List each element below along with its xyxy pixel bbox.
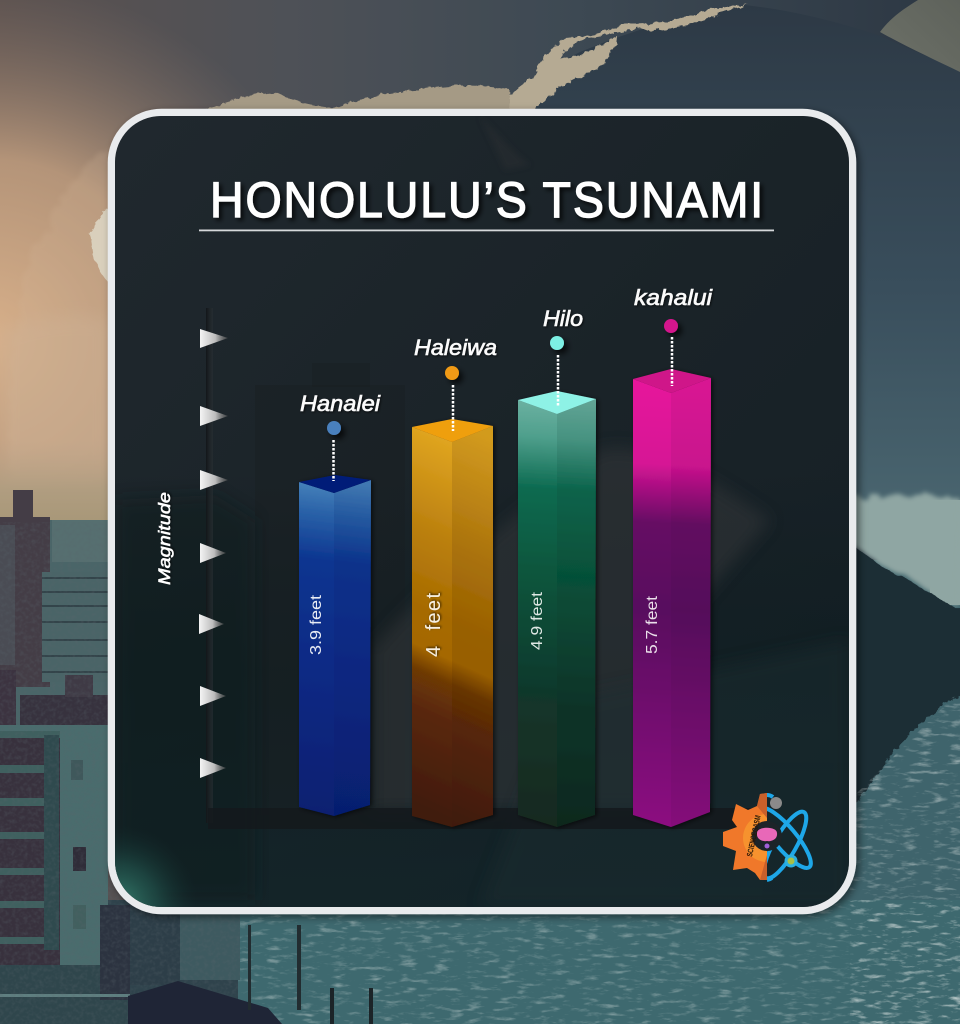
callout: Haleiwa: Haleiwa xyxy=(414,335,497,360)
low cloud strip above panel xyxy=(200,86,510,112)
title underline xyxy=(199,230,774,231)
callout: Hilo: Hilo xyxy=(543,306,583,331)
left cloud xyxy=(10,145,112,500)
brain core xyxy=(752,821,782,851)
bar: Hilo xyxy=(518,391,596,827)
dark wave face xyxy=(845,540,960,810)
logo: gear and atom xyxy=(723,793,818,883)
value label: 4.9 feet xyxy=(529,591,546,650)
dark storm cloud mass xyxy=(480,5,960,520)
wave and sea xyxy=(840,560,960,1024)
bright cloud ridge xyxy=(502,4,748,110)
value label: 4 feet xyxy=(423,593,445,657)
callout: Hanalei xyxy=(300,391,381,481)
bar: Haleiwa xyxy=(412,419,493,827)
logo wordmark: SCIENCEGASM xyxy=(745,814,763,857)
callout: kahalui xyxy=(634,285,713,386)
earth xyxy=(784,854,798,868)
foam crest xyxy=(845,495,960,608)
top-right cloud puff xyxy=(880,0,960,72)
value label: 5.7 feet xyxy=(644,595,661,654)
axis label: Magnitude: Magnitude xyxy=(155,492,174,585)
half gear xyxy=(723,793,767,880)
bar: kahalui xyxy=(633,369,711,827)
title: HONOLULU’S TSUNAMI xyxy=(210,172,765,228)
atom orbits xyxy=(767,793,813,882)
axis tick arrows xyxy=(199,329,228,778)
callout: Hilo xyxy=(543,306,583,407)
roof and utility poles xyxy=(128,981,282,1024)
panel frame xyxy=(112,112,852,910)
y axis xyxy=(199,308,760,829)
callout: Hanalei: Hanalei xyxy=(300,391,381,416)
panel interior texture xyxy=(115,116,849,907)
left city xyxy=(0,440,110,540)
bar: Hanalei xyxy=(299,475,371,816)
callout: Haleiwa xyxy=(414,335,497,431)
panel: chart card xyxy=(112,112,852,910)
value label: 3.9 feet xyxy=(308,594,325,655)
callout: kahalui: kahalui xyxy=(634,285,713,310)
moon xyxy=(770,797,782,809)
